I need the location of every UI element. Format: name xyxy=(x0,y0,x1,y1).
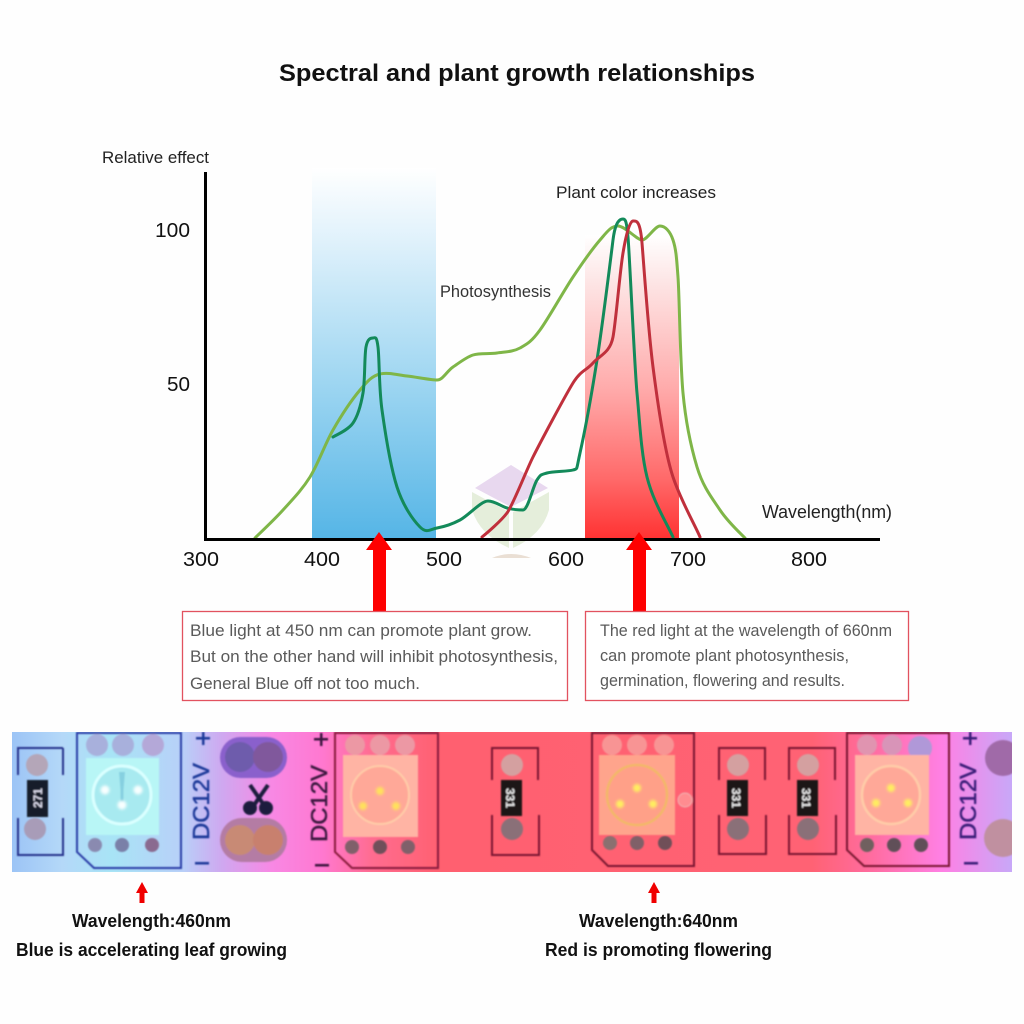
arrow: blue band to callout xyxy=(366,532,392,611)
curve: plant color red xyxy=(482,221,700,537)
x axis title: Wavelength(nm) xyxy=(762,502,892,522)
caption: red LED xyxy=(545,911,772,960)
blue wavelength band xyxy=(312,168,436,539)
x tick labels: 500 xyxy=(426,549,462,571)
LED strip photo xyxy=(12,732,1022,872)
voltage mark 1: DC12V xyxy=(188,762,214,840)
y axis title: Relative effect xyxy=(102,148,209,167)
callout: blue light: But on the other hand will inhibit photosynthesis, xyxy=(190,647,558,666)
resistor 331 middle: 331 xyxy=(729,788,743,808)
watermark logo xyxy=(472,465,549,558)
LED chip red 3 xyxy=(847,733,949,866)
y tick labels xyxy=(155,220,190,396)
caption: red LED: Wavelength:640nm xyxy=(579,911,738,931)
chart: spectral response xyxy=(102,148,892,571)
y tick labels: 50 xyxy=(167,374,190,396)
x tick labels: 300 xyxy=(183,549,219,571)
caption: blue LED: Blue is accelerating leaf growing xyxy=(16,940,287,960)
caption: blue LED xyxy=(16,911,287,960)
small arrow: blue LED xyxy=(136,882,148,903)
x tick labels xyxy=(183,549,827,571)
x tick labels: 700 xyxy=(670,549,706,571)
resistor 331 left: 331 xyxy=(503,788,517,808)
voltage mark 2 xyxy=(310,732,330,868)
LED chip red 2 xyxy=(592,733,694,866)
title: Spectral and plant growth relationships xyxy=(279,60,755,87)
callout: blue light: General Blue off not too much. xyxy=(190,674,420,693)
callout: red light: germination, flowering and results. xyxy=(600,672,845,690)
label: plant color increases: Plant color increases xyxy=(556,183,716,202)
x tick labels: 400 xyxy=(304,549,340,571)
curve: chlorophyll dark green xyxy=(333,219,673,537)
red wavelength band xyxy=(585,235,679,539)
x axis xyxy=(204,538,880,541)
right edge solder pads xyxy=(983,739,1012,858)
small arrow: red LED xyxy=(648,882,660,903)
y axis xyxy=(204,172,207,541)
resistor 331 middle xyxy=(719,748,766,854)
callout: red light: The red light at the wavelength of 660nm xyxy=(600,622,892,640)
callout: red light: can promote plant photosynthesis, xyxy=(600,647,849,665)
x tick labels: 600 xyxy=(548,549,584,571)
voltage mark 3 xyxy=(958,732,979,866)
label: photosynthesis: Photosynthesis xyxy=(440,283,551,301)
resistor 271 xyxy=(18,748,63,855)
resistor 331 right xyxy=(789,748,836,854)
caption: red LED: Red is promoting flowering xyxy=(545,940,772,960)
caption: blue LED: Wavelength:460nm xyxy=(72,911,231,931)
resistor 271: 271 xyxy=(31,788,45,808)
callout: blue light: Blue light at 450 nm can promote plant grow. xyxy=(190,621,532,640)
y tick labels: 100 xyxy=(155,220,190,242)
LED chip blue xyxy=(77,733,181,868)
arrow: red band to callout xyxy=(626,532,652,611)
voltage mark 2: DC12V xyxy=(306,764,332,842)
resistor 331 left xyxy=(492,748,539,855)
cut mark scissors xyxy=(245,785,271,813)
callout: blue light xyxy=(182,612,568,700)
curve: photosynthesis light green xyxy=(255,226,745,538)
voltage mark 3: DC12V xyxy=(955,762,981,840)
resistor 331 right: 331 xyxy=(799,788,813,808)
LED chip red 1 xyxy=(335,733,438,868)
solder pads xyxy=(220,737,287,862)
voltage mark 1 xyxy=(192,732,211,866)
x tick labels: 800 xyxy=(791,549,827,571)
callout: red light xyxy=(586,612,908,700)
